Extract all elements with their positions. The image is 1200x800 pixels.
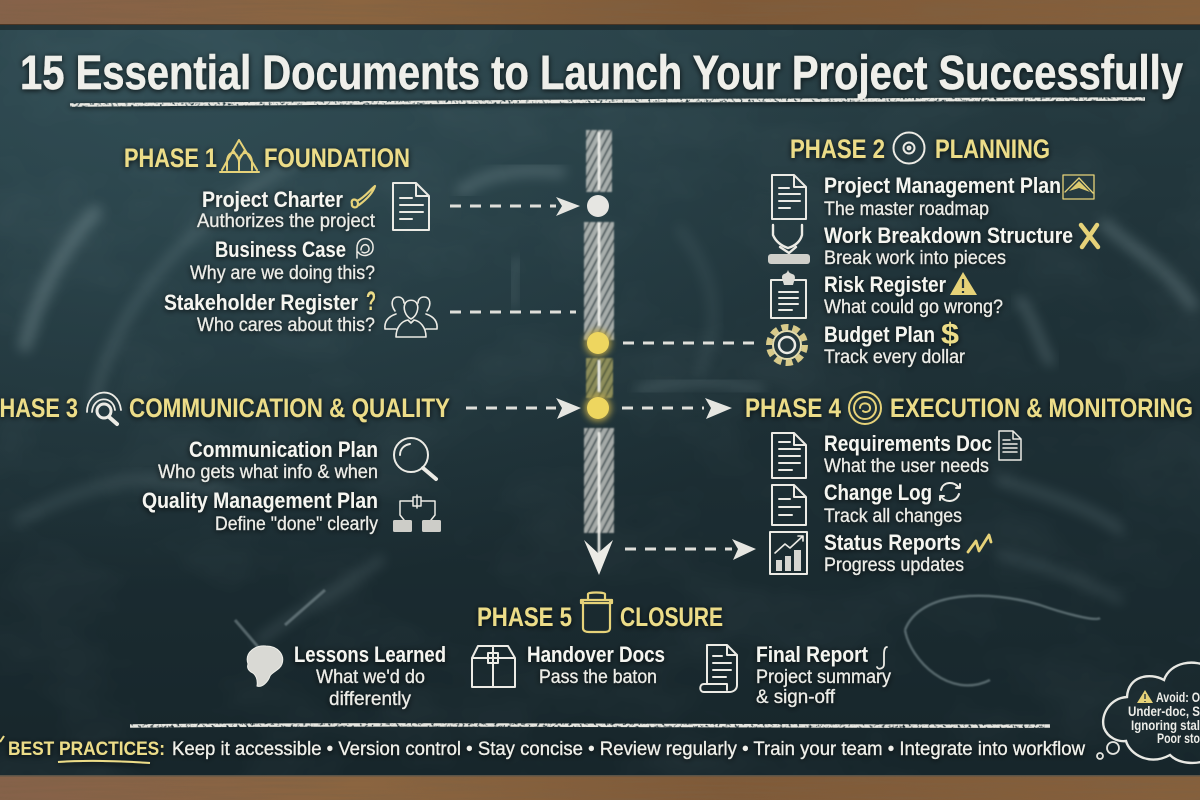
- icon: scroll report: [700, 645, 737, 692]
- phase 1 heading: FOUNDATION: [264, 143, 410, 173]
- communication plan: [158, 437, 378, 483]
- chalk divider: [130, 725, 1050, 726]
- timeline node 2: [585, 330, 611, 356]
- icon: document: [772, 175, 806, 219]
- icon: document: [393, 183, 429, 230]
- arrow: timeline to budget: [623, 342, 755, 344]
- arrow: timeline to phase 4: [622, 398, 732, 419]
- quality management plan: Quality Management Plan: [142, 488, 378, 513]
- icon: gear: [769, 327, 805, 363]
- work breakdown structure: Work Breakdown Structure: [824, 223, 1073, 248]
- stakeholder register: Stakeholder Register: [164, 290, 358, 315]
- handover docs: Pass the baton: [539, 667, 657, 688]
- budget plan: $: [941, 318, 959, 351]
- change log: Change Log: [824, 480, 932, 505]
- lessons learned: Lessons Learned: [294, 642, 446, 667]
- phase 5 heading: [477, 602, 723, 632]
- phase 2 heading: PLANNING: [935, 134, 1050, 164]
- project charter: [197, 187, 376, 232]
- lessons learned: What we'd do: [316, 667, 425, 688]
- callout: avoid thought bubble: [1097, 663, 1200, 763]
- project charter: Authorizes the project: [197, 211, 376, 232]
- final report: & sign-off: [756, 687, 836, 708]
- change log: [824, 480, 962, 527]
- risk register: [824, 272, 1003, 318]
- wooden frame bottom: [0, 775, 1200, 800]
- phase 1 heading: PHASE 1: [124, 143, 217, 173]
- panel: phase 3 communication and quality: [0, 393, 450, 535]
- icon: document: [772, 485, 806, 525]
- icon: growth chart: [770, 532, 807, 574]
- budget plan: Track every dollar: [824, 347, 966, 368]
- panel: phase 5 closure: [247, 592, 891, 710]
- change log: Track all changes: [824, 506, 962, 527]
- wooden frame top: [0, 0, 1200, 25]
- business case: Why are we doing this?: [190, 263, 375, 284]
- icon: bin: [581, 592, 612, 632]
- project management plan: Project Management Plan: [824, 173, 1061, 198]
- arrow: stakeholder dashes: [450, 310, 576, 314]
- icon: yellow trend line: [968, 535, 991, 552]
- phase 3 heading: COMMUNICATION & QUALITY: [129, 393, 450, 423]
- icon: breakdown hands on block: [768, 225, 810, 264]
- quality management plan: Define "done" clearly: [215, 514, 378, 535]
- communication plan: Who gets what info & when: [158, 462, 378, 483]
- icon: refresh: [940, 483, 960, 501]
- lessons learned: differently: [329, 689, 411, 710]
- timeline shaft: [584, 130, 614, 560]
- icon: document: [772, 433, 806, 478]
- icon: target circle: [894, 132, 924, 164]
- thought bubble tail: [1097, 742, 1119, 759]
- avoid text: [1128, 690, 1200, 746]
- icon: arches triangle: [220, 140, 259, 172]
- project management plan: The master roadmap: [824, 199, 989, 220]
- icon: signal magnifier: [87, 393, 121, 424]
- budget plan: [824, 318, 966, 368]
- business case: [190, 237, 375, 284]
- arrow: charter to timeline: [450, 197, 580, 216]
- icon: magnifying loop: [357, 239, 373, 258]
- icon: small document: [999, 431, 1021, 460]
- arrow: phase 3 to timeline: [466, 398, 581, 419]
- icon: brain: [247, 646, 283, 686]
- status reports: Status Reports: [824, 530, 961, 555]
- business case: Business Case: [215, 237, 346, 262]
- icon: flow diagram: [393, 495, 441, 532]
- cloud outline: [1103, 663, 1200, 763]
- icon: people group: [385, 297, 437, 337]
- panel: phase 1 foundation: [124, 140, 437, 337]
- requirements doc: What the user needs: [824, 456, 989, 477]
- final report: Project summary: [756, 667, 891, 688]
- status reports: [824, 530, 964, 576]
- phase 5 heading: CLOSURE: [620, 602, 723, 632]
- final report: [756, 642, 891, 708]
- phase 4 heading: [745, 393, 1193, 423]
- budget plan: Budget Plan: [824, 322, 935, 347]
- handover docs: [527, 642, 665, 688]
- icon: crossed tools: [1081, 225, 1098, 247]
- icon: box: [472, 646, 515, 687]
- best practices banner: BEST PRACTICES:: [8, 739, 165, 760]
- project management plan: [824, 173, 1061, 220]
- requirements doc: Requirements Doc: [824, 431, 992, 456]
- central timeline: [584, 130, 614, 575]
- final report: Final Report: [756, 642, 869, 667]
- icon: cycle target: [849, 392, 881, 424]
- icon: quill: [352, 186, 375, 207]
- stakeholder register: Who cares about this?: [197, 315, 375, 336]
- project charter: Project Charter: [202, 187, 343, 212]
- stakeholder register: ?: [366, 286, 376, 316]
- timeline node 1: [587, 195, 609, 217]
- icon: music note: [877, 647, 887, 669]
- best practices banner: Keep it accessible • Version control • Stay concise • Review regularly • Train your team • Integrate into workflow: [172, 739, 1085, 760]
- icon: warning triangle: [950, 272, 977, 295]
- phase 4 heading: PHASE 4: [745, 393, 841, 423]
- icon: clipboard: [771, 270, 806, 318]
- icon: magnifying glass: [394, 438, 436, 479]
- stakeholder register: [164, 286, 376, 336]
- status reports: Progress updates: [824, 555, 964, 576]
- phase 3 heading: [0, 393, 450, 423]
- risk register: Risk Register: [824, 272, 946, 297]
- work breakdown structure: [824, 223, 1073, 269]
- panel: phase 4 execution and monitoring: [745, 392, 1193, 576]
- lessons learned: [294, 642, 446, 710]
- phase 2 heading: [790, 134, 1050, 164]
- timeline arrowhead: [584, 540, 613, 575]
- handover docs: Handover Docs: [527, 642, 665, 667]
- icon: roadmap: [1063, 175, 1094, 199]
- work breakdown structure: Break work into pieces: [824, 248, 1006, 269]
- quality management plan: [142, 488, 378, 535]
- best practices banner: [0, 736, 1085, 763]
- communication plan: Communication Plan: [189, 437, 378, 462]
- warning icon: [1137, 690, 1153, 703]
- risk register: What could go wrong?: [824, 297, 1003, 318]
- requirements doc: [824, 431, 992, 477]
- timeline node 3: [585, 395, 611, 421]
- panel: phase 2 planning: [768, 132, 1098, 368]
- phase 1 heading: [124, 143, 410, 173]
- arrow: timeline to status reports: [625, 539, 756, 560]
- phase 2 heading: PHASE 2: [790, 134, 885, 164]
- phase 5 heading: PHASE 5: [477, 602, 572, 632]
